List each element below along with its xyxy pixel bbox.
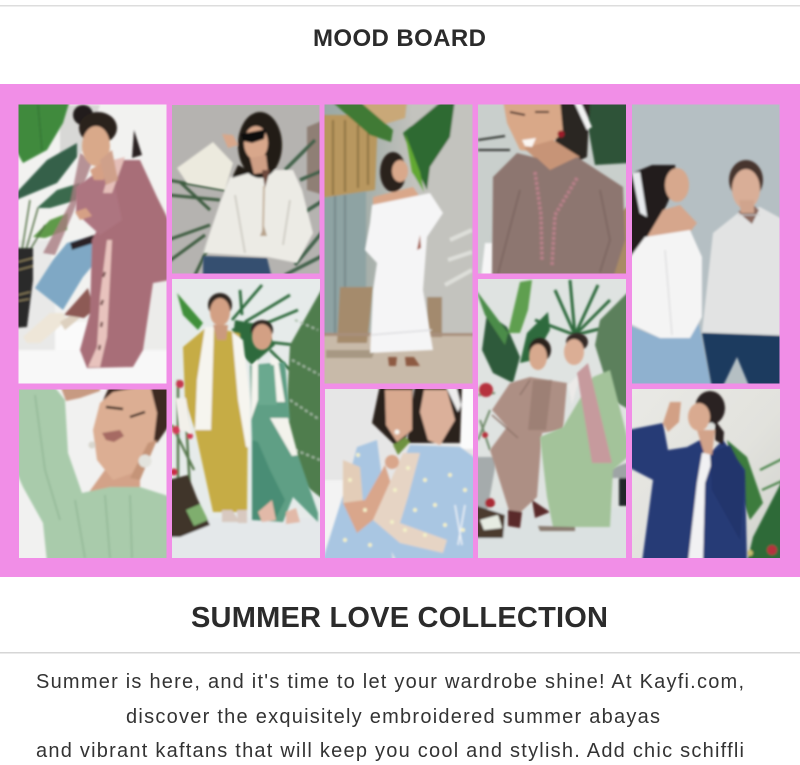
figure portrait (19, 390, 166, 558)
photo: woman in mauve abaya seated (14, 100, 170, 388)
body line 2: discover the exquisitely embroidered summer abayas (126, 706, 660, 728)
photo: two women in blue floral dresses with flower (325, 389, 473, 558)
backdrop (325, 389, 473, 550)
left figure (628, 165, 712, 388)
top divider line (0, 5, 800, 6)
woman in taupe (490, 338, 567, 528)
two figures (322, 385, 478, 562)
photo: two seated women in taupe and green abayas (474, 279, 630, 562)
photo: woman in white blouse and sunglasses (168, 105, 324, 278)
plants and floor (172, 283, 320, 538)
plant and pot (14, 100, 93, 328)
heading: summer love collection: SUMMER LOVE COLLECTION (191, 602, 608, 634)
plants, bench and floor (478, 279, 626, 540)
portrait figure (492, 100, 625, 278)
photo: smiling woman in embroidered taupe top (478, 100, 630, 278)
plant and backdrop (478, 100, 630, 278)
right figure (702, 160, 784, 388)
room, curtain and decor (320, 100, 477, 388)
woman in teal abaya (250, 320, 318, 524)
photo: two women in white tops and jeans (628, 104, 784, 388)
section divider line (0, 652, 800, 654)
body line 3: and vibrant kaftans that will keep you cool and stylish. Add chic schiffli (36, 740, 744, 762)
figure with blouse (177, 112, 313, 278)
woman in green (538, 333, 628, 531)
photo: woman in long white dress (320, 100, 477, 388)
panel: pink collage background (0, 84, 800, 577)
figure in navy (628, 391, 747, 562)
backdrop and palm (168, 120, 324, 275)
woman in yellow abaya (175, 293, 250, 523)
seated figure (23, 105, 170, 368)
figure in dress (365, 152, 443, 366)
plant behind (727, 440, 784, 562)
photo: close-up woman in sage green top (19, 390, 166, 558)
heading: mood board: MOOD BOARD (313, 25, 486, 52)
wall and floor (20, 104, 100, 350)
body line 1: Summer is here, and it's time to let your wardrobe shine! At Kayfi.com, (36, 671, 744, 693)
photo: two women in yellow and teal abayas with plants (168, 279, 324, 562)
photo: woman in navy textured abaya (628, 389, 784, 562)
body text (36, 671, 744, 762)
